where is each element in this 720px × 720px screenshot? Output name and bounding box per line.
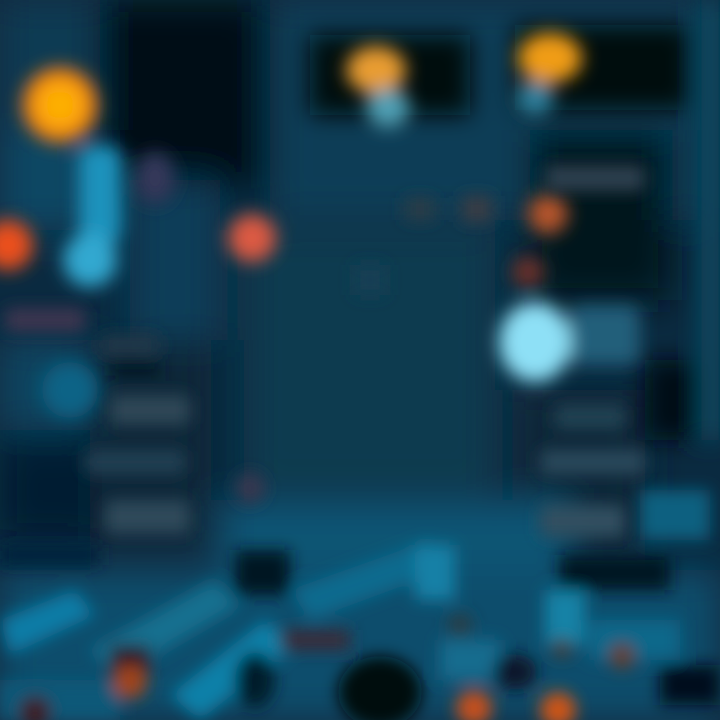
icon: cyan side patch (570, 305, 640, 365)
icon: top right orange circle (518, 33, 582, 83)
icon: orange bottom markers (113, 665, 147, 699)
icon: small orange dot (528, 194, 568, 234)
icon: large sun circle (22, 67, 98, 143)
panel: bottom pattern (0, 490, 720, 720)
icon: top orange circle (346, 46, 406, 94)
icon: muted purple patch (135, 152, 175, 204)
icon: small teal circle (42, 362, 98, 418)
text block smudges (5, 165, 645, 537)
icon: centre-left coral circle (228, 214, 276, 262)
top panel windows (310, 0, 720, 440)
icon: top light-blue drop (366, 88, 410, 128)
panel: orange and blue highlights (0, 33, 640, 418)
icon: small red dot (512, 256, 544, 288)
icon: tall blue bar (78, 145, 122, 245)
icon: blue bulb (63, 233, 117, 287)
icon: top right light-blue drop (516, 80, 554, 116)
icon: left orange circle (0, 220, 33, 270)
icon: bright cyan glow (499, 302, 571, 382)
